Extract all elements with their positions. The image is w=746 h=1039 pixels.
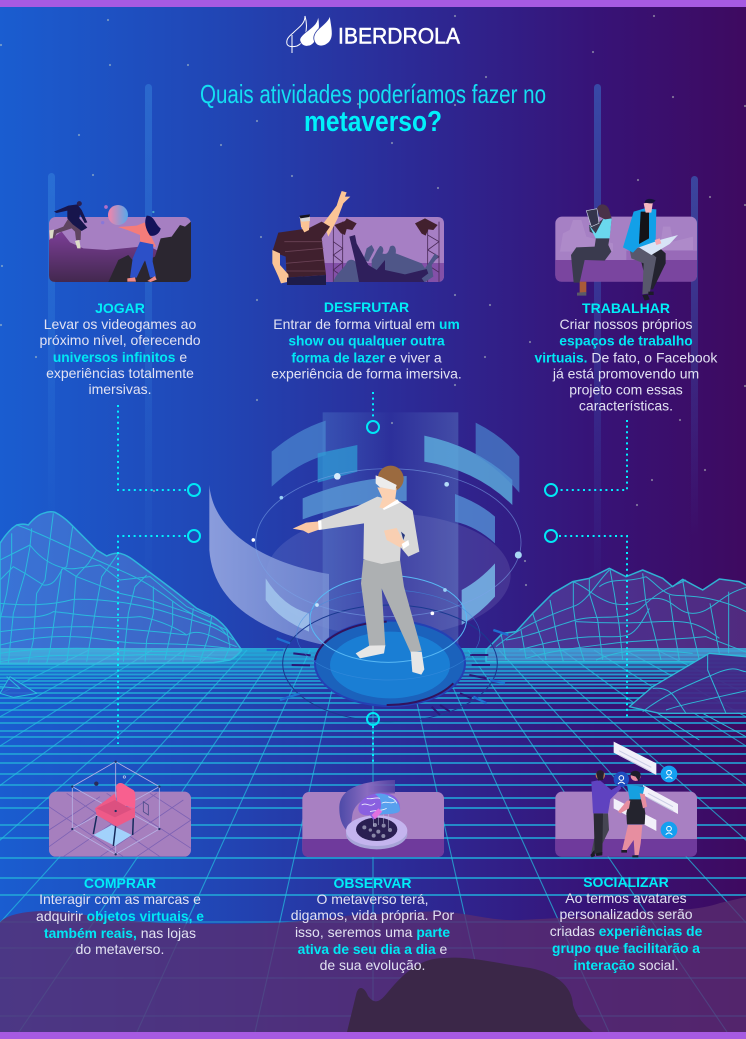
left wireframe mountain	[0, 512, 242, 697]
illustration: game players	[49, 201, 191, 282]
body text: do metaverso.	[76, 941, 164, 957]
body text: forma de lazer e viver a	[291, 350, 442, 366]
body text: O metaverso terá,	[316, 891, 429, 907]
body text: Ao termos avatares	[565, 890, 687, 906]
translucent column	[323, 412, 458, 650]
connector: trabalhar	[545, 420, 627, 496]
panel: observar	[291, 780, 455, 973]
icon: three leaves	[287, 15, 332, 53]
body text: digamos, vida própria. Por	[291, 907, 455, 923]
illustration: avatars chatting	[555, 742, 697, 857]
bottom bar	[0, 1032, 746, 1039]
body text: personalizados serão	[559, 906, 693, 922]
body text	[39, 316, 201, 397]
body text	[291, 891, 455, 973]
body text: imersivas.	[88, 381, 152, 397]
body text: ativa de seu dia a dia e	[298, 941, 448, 957]
body text: criadas experiências de	[550, 923, 703, 939]
connector: jogar	[118, 405, 200, 496]
illustration: brain hologram	[302, 780, 444, 857]
body text: adquirir objetos virtuais, e	[36, 908, 204, 924]
illustration: virtual chair	[49, 760, 191, 857]
body text: virtuais. De fato, o Facebook	[535, 350, 718, 366]
body text: próximo nível, oferecendo	[39, 332, 201, 348]
heading: TRABALHAR	[582, 300, 670, 316]
orbit rings	[256, 469, 521, 680]
heading: SOCIALIZAR	[583, 874, 669, 890]
central figure scene	[209, 412, 522, 722]
body text	[550, 890, 703, 973]
connector: desfrutar	[367, 392, 379, 433]
body text	[535, 316, 718, 414]
panel: socializar	[550, 742, 703, 973]
body text: experiência de forma imersiva.	[271, 366, 462, 382]
body text: Criar nossos próprios	[559, 316, 693, 332]
body text: Entrar de forma virtual em um	[273, 316, 460, 332]
connector: comprar	[118, 530, 200, 744]
panel: trabalhar	[535, 199, 718, 414]
body text: características.	[579, 398, 673, 414]
body text: também reais, nas lojas	[44, 925, 196, 941]
illustration: concert	[272, 191, 444, 285]
body text: isso, seremos uma parte	[295, 924, 450, 940]
body text	[36, 891, 204, 957]
logo: Iberdrola	[287, 15, 460, 53]
title	[200, 79, 546, 138]
connector: socializar	[545, 530, 627, 717]
body text: Interagir com as marcas e	[39, 891, 201, 907]
illustration: remote workers	[555, 199, 697, 301]
panel: jogar	[39, 201, 201, 397]
body text: espaços de trabalho	[559, 334, 693, 348]
body text: interação social.	[574, 957, 678, 973]
body text: Levar os videogames ao	[44, 316, 196, 332]
right wireframe mountains	[486, 568, 746, 740]
body text: show ou qualquer outra	[288, 334, 445, 348]
body text: já está promovendo um	[552, 366, 699, 382]
connector: observar	[367, 713, 379, 762]
figure	[293, 466, 424, 675]
dark foreground hills	[0, 897, 746, 1032]
heading: COMPRAR	[84, 875, 156, 891]
body text	[271, 316, 462, 382]
floor pad	[267, 605, 508, 722]
panel: desfrutar	[271, 191, 462, 382]
heading: JOGAR	[95, 300, 145, 316]
starfield	[0, 15, 746, 586]
panel: comprar	[36, 760, 204, 957]
body text: grupo que facilitarão a	[552, 941, 700, 956]
logo: Iberdrola: IBERDROLA	[338, 24, 460, 48]
vertical light bars	[48, 84, 698, 604]
body text: de sua evolução.	[320, 957, 425, 973]
orbit nodes	[251, 473, 522, 615]
holographic panels	[209, 421, 519, 646]
heading: DESFRUTAR	[324, 299, 409, 315]
heading: OBSERVAR	[333, 875, 412, 891]
title: metaverso?	[304, 106, 442, 138]
top bar	[0, 0, 746, 7]
body text: universos infinitos e	[53, 349, 187, 365]
body text: experiências totalmente	[46, 365, 194, 381]
perspective floor grid	[0, 648, 746, 1032]
title: Quais atividades poderíamos fazer no	[200, 79, 546, 109]
body text: projeto com essas	[569, 382, 683, 398]
